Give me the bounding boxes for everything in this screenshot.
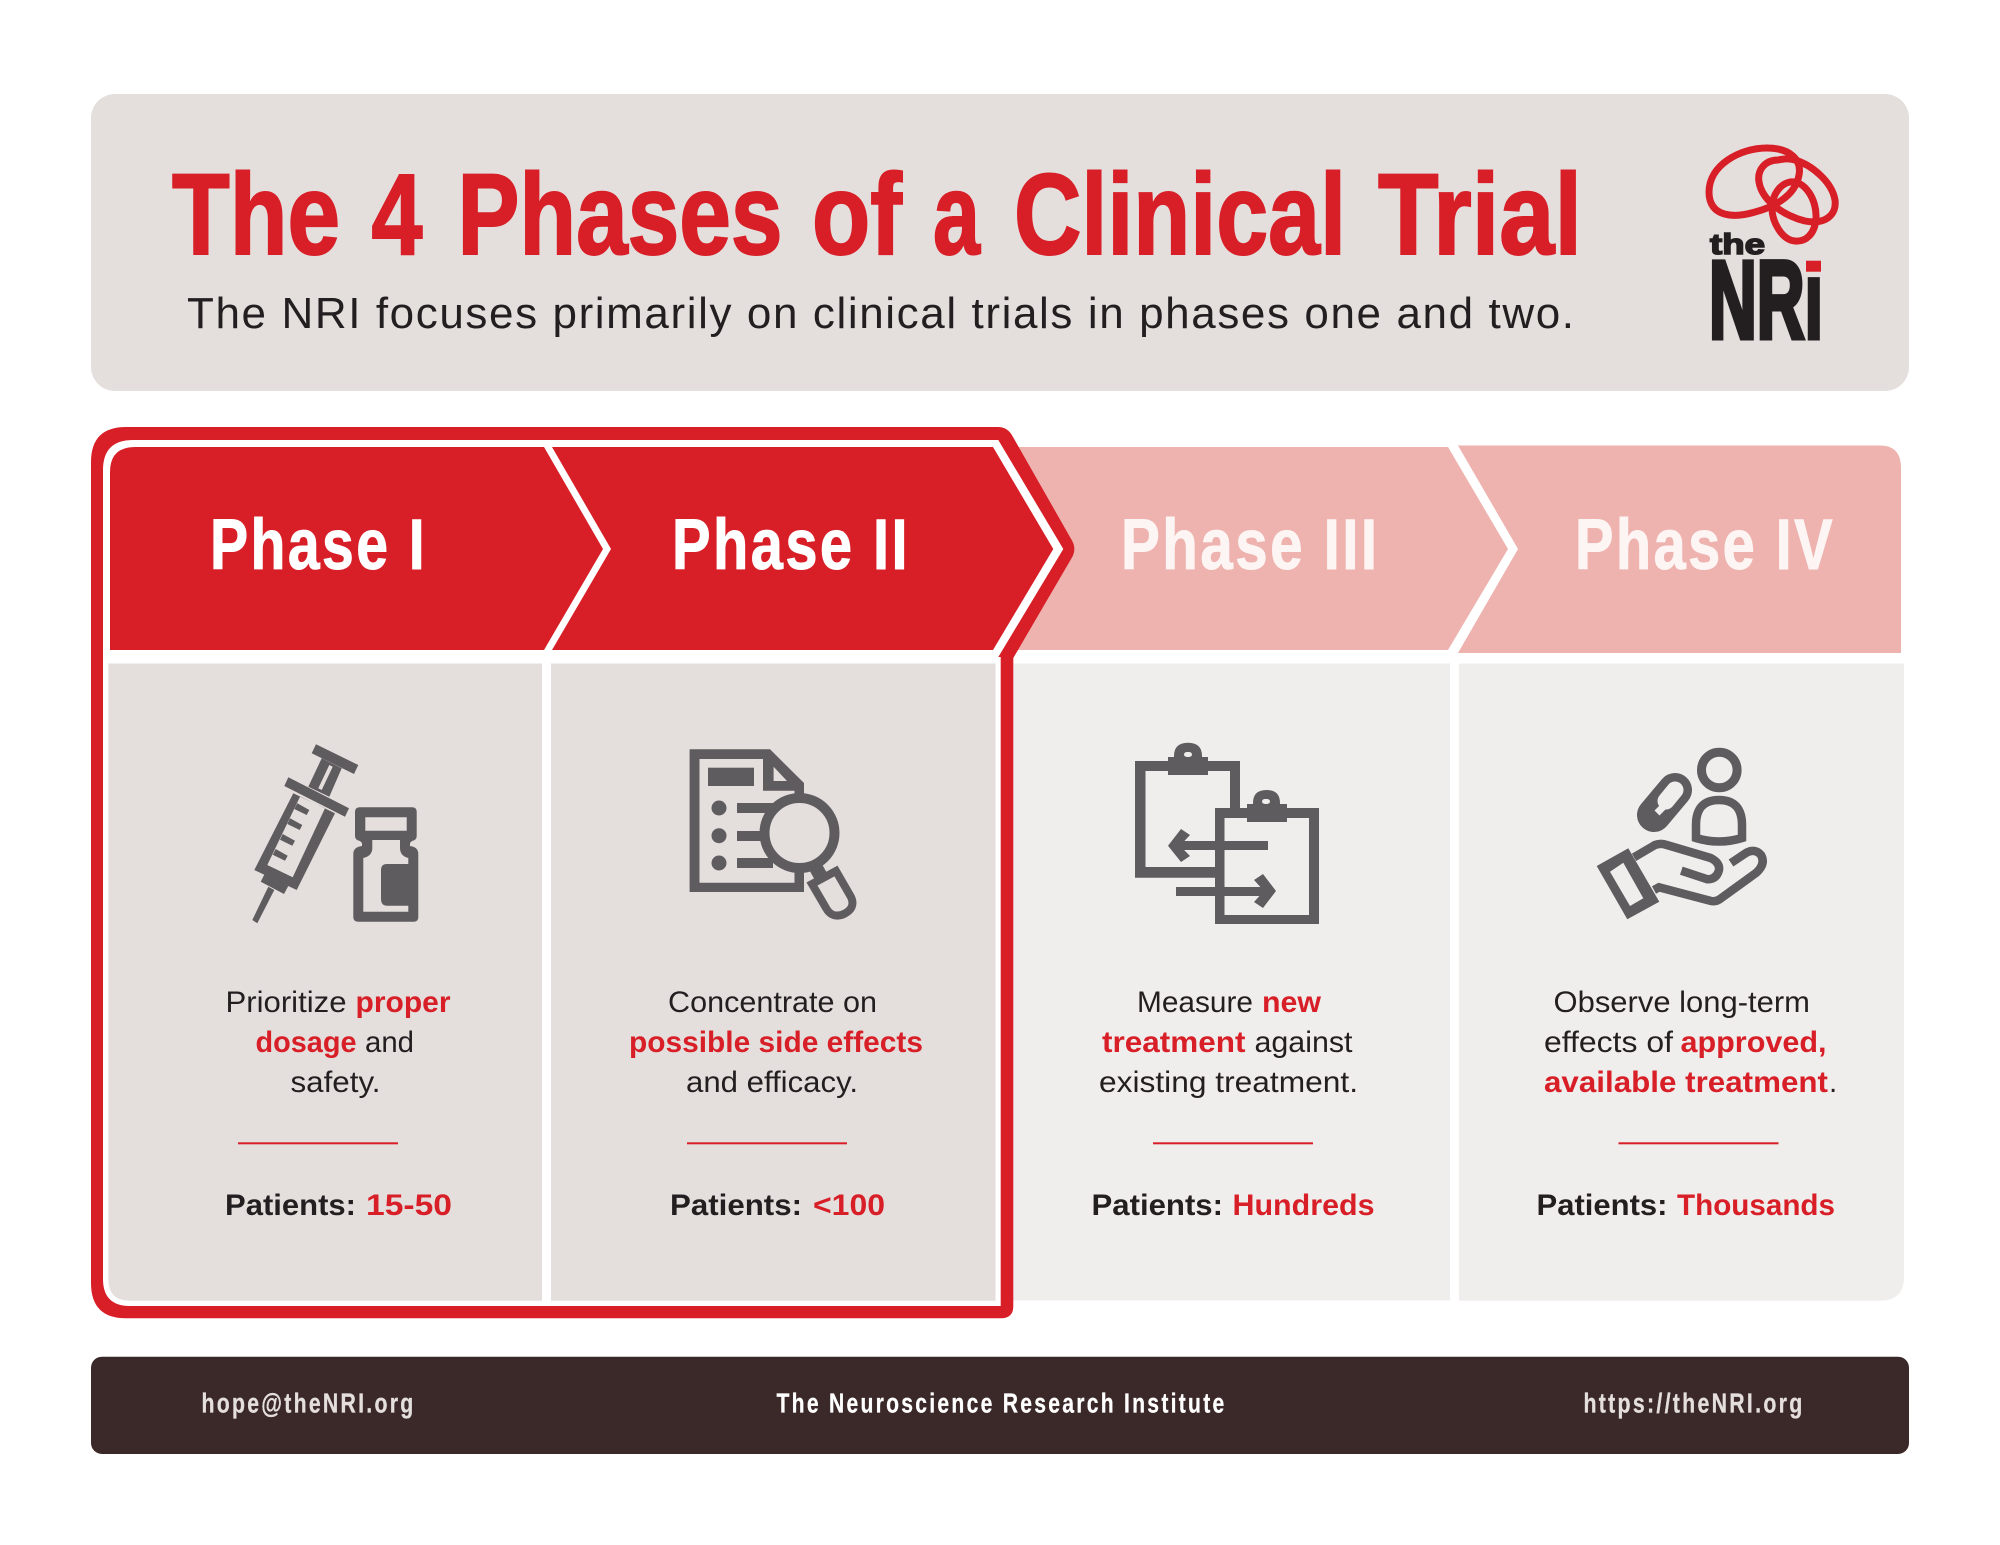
icon: document and magnifier	[690, 749, 852, 916]
phase IV label: Phase IV	[1575, 506, 1835, 585]
title: Trial	[1378, 151, 1582, 279]
title: The	[172, 151, 340, 279]
panel: phase III and IV background	[1000, 446, 1904, 1301]
footer url: https://theNRI.org	[1584, 1388, 1804, 1419]
subtitle: The NRI focuses primarily on clinical trials in phases one and two.	[187, 289, 1574, 338]
description: phase IV: approved,	[1680, 1026, 1826, 1059]
title: 4	[372, 151, 423, 279]
patients: phase II: <100	[813, 1189, 885, 1222]
description: phase II: possible side effects	[629, 1026, 923, 1059]
panel: phase III body	[1092, 743, 1374, 1222]
phase III label: Phase III	[1121, 506, 1380, 585]
logo: the NRI: the	[1710, 229, 1765, 261]
patients: phase II: Patients:	[670, 1189, 802, 1222]
phase II chevron	[552, 447, 1053, 650]
footer email: hope@theNRI.org	[202, 1388, 416, 1419]
description: phase IV: .	[1829, 1066, 1837, 1099]
icon: syringe and vial	[252, 744, 418, 923]
patients: phase I	[225, 1189, 452, 1222]
panel: footer	[91, 1357, 1909, 1454]
patients: phase III: Hundreds	[1232, 1189, 1374, 1222]
patients: phase IV: Thousands	[1677, 1189, 1835, 1222]
phase I chevron	[110, 447, 603, 650]
patients: phase II	[670, 1189, 885, 1222]
phase II chevron: Phase II	[672, 506, 910, 585]
panel: phase I body	[108, 664, 542, 1301]
footer organization: The Neuroscience Research Institute	[776, 1388, 1226, 1419]
description: phase I: dosage	[256, 1026, 356, 1059]
description: phase IV: effects of	[1544, 1026, 1674, 1059]
title: Clinical	[1014, 151, 1346, 279]
panel: header	[91, 94, 1909, 391]
description: phase II	[629, 986, 923, 1099]
description: phase I: and	[365, 1026, 414, 1059]
title: a	[933, 151, 981, 279]
logo: the NRI: NRi	[1709, 239, 1823, 362]
patients: phase III	[1092, 1189, 1374, 1222]
panel: phase IV body	[1536, 752, 1837, 1222]
description: phase III: Measure	[1137, 986, 1253, 1019]
title: Phases	[458, 151, 782, 279]
description: phase II: Concentrate on	[668, 986, 877, 1019]
description: phase I: safety.	[290, 1066, 380, 1099]
description: phase IV: Observe long-term	[1554, 986, 1810, 1019]
description: phase II: and efficacy.	[686, 1066, 858, 1099]
logo: the NRI	[1709, 148, 1835, 362]
panel: highlight outline phases I and II	[91, 427, 1074, 1318]
description: phase IV	[1544, 986, 1837, 1099]
title: of	[812, 151, 903, 279]
description: phase I: proper	[356, 986, 451, 1019]
icon: clipboards with arrows	[1135, 743, 1319, 924]
description: phase III: new	[1262, 986, 1321, 1019]
patients: phase I: Patients:	[225, 1189, 356, 1222]
panel: phase II body	[551, 664, 996, 1301]
description: phase I	[226, 986, 451, 1099]
phase I chevron: Phase I	[210, 506, 427, 585]
icon: hand holding pill and person	[1597, 752, 1763, 919]
description: phase III	[1099, 986, 1358, 1099]
description: phase I: Prioritize	[226, 986, 346, 1019]
patients: phase IV	[1536, 1189, 1835, 1222]
patients: phase I: 15-50	[366, 1189, 452, 1222]
description: phase III: existing treatment.	[1099, 1066, 1358, 1099]
description: phase IV: available treatment	[1544, 1066, 1828, 1099]
patients: phase IV: Patients:	[1536, 1189, 1668, 1222]
description: phase III: against	[1254, 1026, 1352, 1059]
description: phase III: treatment	[1102, 1026, 1246, 1059]
patients: phase III: Patients:	[1092, 1189, 1223, 1222]
